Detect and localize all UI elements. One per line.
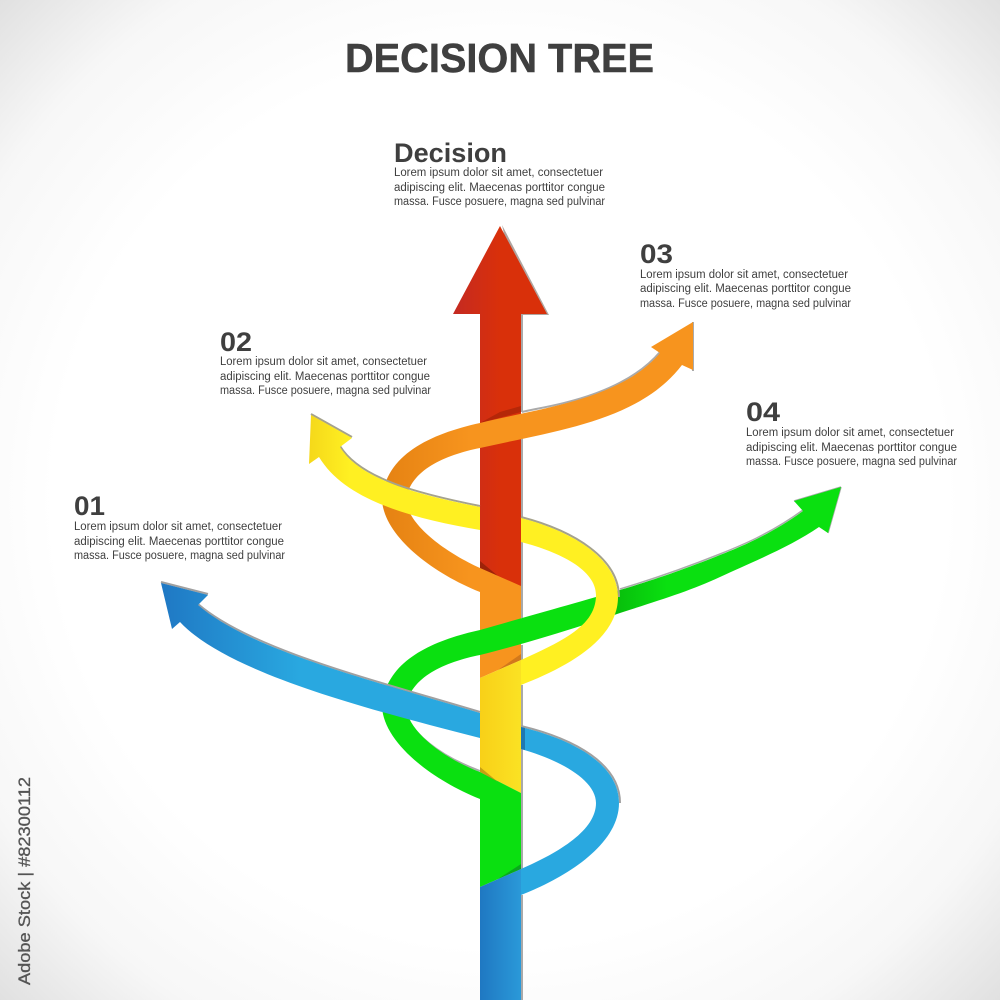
arrow: decision (red) <box>453 225 549 590</box>
arrow: 04 (green) upper section <box>382 487 841 707</box>
arrow: 04 (green) lower section <box>382 700 521 887</box>
text block: 04: Lorem ipsum dolor sit amet, consectetuer <box>746 427 954 439</box>
text block: 03: massa. Fusce posuere, magna sed pulvinar <box>640 298 851 310</box>
text block: 04: massa. Fusce posuere, magna sed pulvinar <box>746 456 957 468</box>
title: DECISION TREE <box>345 35 654 81</box>
text block: 01: 01 <box>74 491 105 521</box>
text block: 02 <box>220 327 431 397</box>
text block: 01: massa. Fusce posuere, magna sed pulvinar <box>74 550 285 562</box>
text block: 03: Lorem ipsum dolor sit amet, consectetuer <box>640 269 848 281</box>
text block: 04: adipiscing elit. Maecenas porttitor congue <box>746 442 957 454</box>
side credit: Adobe Stock | #82300112 <box>16 777 34 985</box>
text block: decision <box>394 138 605 208</box>
text block: decision: Lorem ipsum dolor sit amet, consectetuer <box>394 167 603 179</box>
text block: 02: massa. Fusce posuere, magna sed pulvinar <box>220 385 431 397</box>
text block: 03: adipiscing elit. Maecenas porttitor congue <box>640 283 851 295</box>
arrow: 01 (blue) <box>161 582 620 1000</box>
text block: 01: Lorem ipsum dolor sit amet, consectetuer <box>74 521 282 533</box>
arrow: 03 (orange) <box>382 322 693 678</box>
text block: 03: 03 <box>640 239 673 269</box>
text block: 02: adipiscing elit. Maecenas porttitor congue <box>220 371 430 383</box>
text block: 04 <box>746 397 957 468</box>
text block: 02: 02 <box>220 327 252 357</box>
text block: 03 <box>640 239 851 310</box>
text block: decision: adipiscing elit. Maecenas porttitor congue <box>394 182 605 194</box>
text block: 04: 04 <box>746 397 780 427</box>
text block: decision: Decision <box>394 138 507 168</box>
text block: 01: adipiscing elit. Maecenas porttitor congue <box>74 536 284 548</box>
text block: 02: Lorem ipsum dolor sit amet, consectetuer <box>220 356 427 368</box>
text block: decision: massa. Fusce posuere, magna sed pulvinar <box>394 196 605 208</box>
text block: 01 <box>74 491 285 562</box>
arrow: 02 (yellow) <box>309 414 619 793</box>
